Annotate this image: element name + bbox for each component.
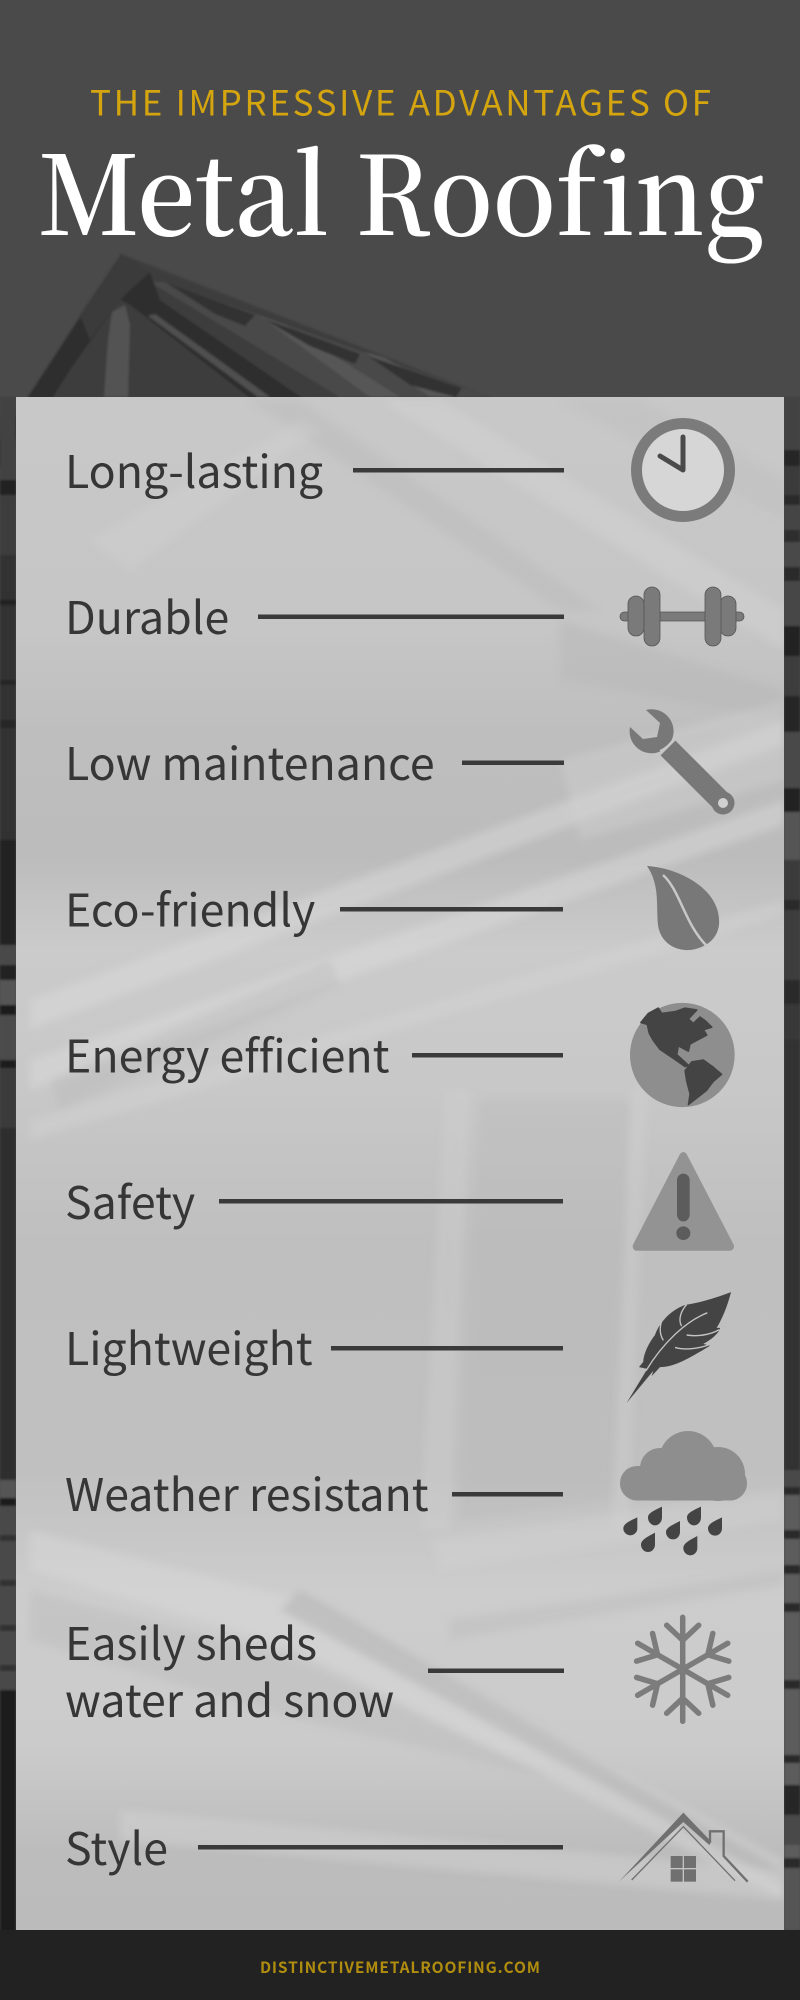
right side strip <box>784 397 800 1930</box>
item: Low maintenance: Low maintenance <box>65 728 435 793</box>
item: Eco-friendly: Eco-friendly <box>65 874 315 940</box>
item: Easily sheds water and snow: water and snow <box>65 1665 394 1730</box>
icon: wrench <box>630 709 734 814</box>
bottom band <box>0 1930 800 2000</box>
icon: leaf <box>647 866 719 950</box>
left side strip <box>0 397 16 1940</box>
item: Eco-friendly <box>65 874 563 940</box>
icon: clock <box>636 424 730 516</box>
item: Weather resistant: Weather resistant <box>65 1459 429 1524</box>
footer website: DISTINCTIVEMETALROOFING.COM <box>260 1956 540 1978</box>
icon: snowflake <box>630 1617 736 1721</box>
item: Easily sheds water and snow <box>65 1608 564 1730</box>
item: Safety <box>65 1167 563 1232</box>
icon: globe <box>630 1003 735 1107</box>
item: Energy efficient <box>65 1020 563 1086</box>
title: Metal Roofing <box>38 109 765 267</box>
icon: feather <box>627 1292 731 1403</box>
panel: advantages list <box>16 397 784 1930</box>
item: Long-lasting: Long-lasting <box>65 436 323 501</box>
icon: house <box>619 1813 748 1882</box>
item: Lightweight: Lightweight <box>65 1313 313 1378</box>
item: Long-lasting <box>65 436 564 501</box>
icon: warning triangle <box>637 1156 730 1246</box>
item: Energy efficient: Energy efficient <box>65 1020 390 1086</box>
item: Style <box>65 1813 563 1878</box>
item: Lightweight <box>65 1313 563 1378</box>
subtitle: THE IMPRESSIVE ADVANTAGES OF <box>90 76 711 126</box>
item: Style: Style <box>65 1813 168 1878</box>
item: Durable: Durable <box>65 582 229 647</box>
icon: rain cloud <box>620 1431 747 1555</box>
item: Easily sheds water and snow: Easily sheds <box>65 1608 317 1673</box>
icon: dumbbell <box>620 587 744 646</box>
item: Safety: Safety <box>65 1167 195 1232</box>
item: Durable <box>65 582 564 647</box>
